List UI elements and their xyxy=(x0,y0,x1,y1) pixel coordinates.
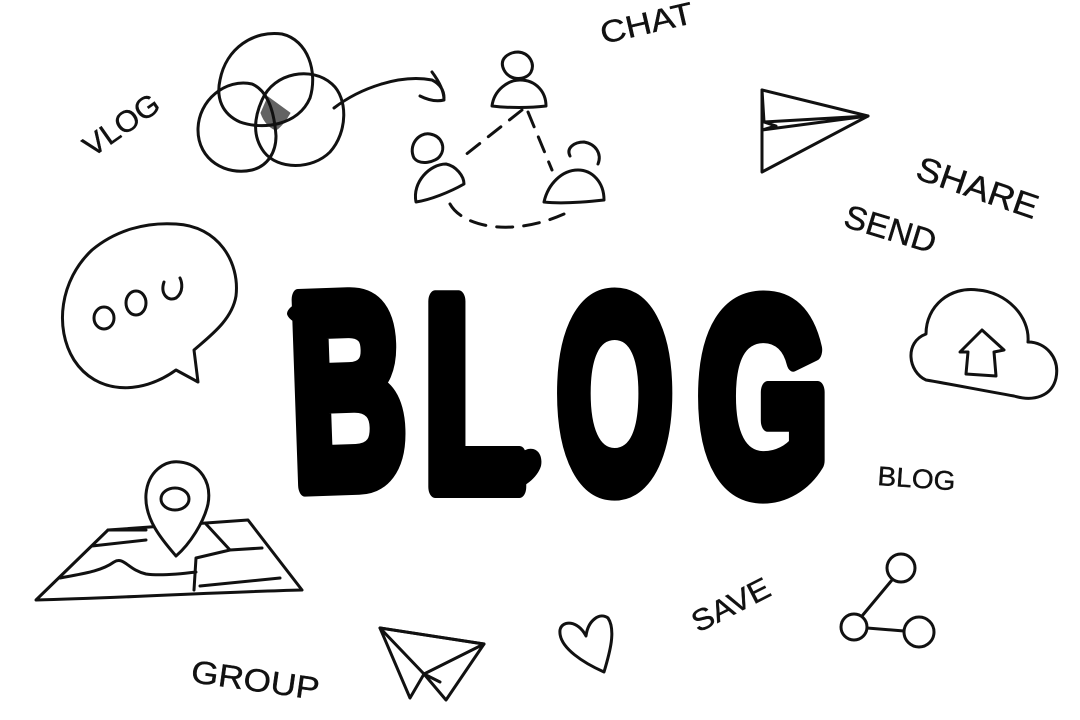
icon: network of people xyxy=(412,52,604,227)
label: GROUP: GROUP xyxy=(189,655,322,707)
icon: venn diagram with arrow xyxy=(198,33,444,171)
label: SHARE: SHARE xyxy=(911,150,1043,226)
icon: cloud upload xyxy=(911,289,1057,398)
title: BLOG xyxy=(285,238,828,548)
icon: heart xyxy=(560,616,612,672)
icon: map with location pin xyxy=(36,462,302,600)
icon: share nodes xyxy=(841,554,934,647)
icon: speech bubble xyxy=(62,224,236,388)
label: VLOG: VLOG xyxy=(77,87,166,164)
icon: paper plane top right xyxy=(762,90,868,172)
label: SAVE: SAVE xyxy=(686,571,776,639)
title: BLOG: O xyxy=(557,244,673,545)
icon: paper plane bottom xyxy=(380,628,484,700)
title: BLOG: L xyxy=(424,244,525,545)
label: BLOG small: BLOG xyxy=(877,461,957,496)
label: SEND: SEND xyxy=(840,199,941,261)
title: BLOG: G xyxy=(698,246,828,548)
title: BLOG: B xyxy=(285,238,410,543)
